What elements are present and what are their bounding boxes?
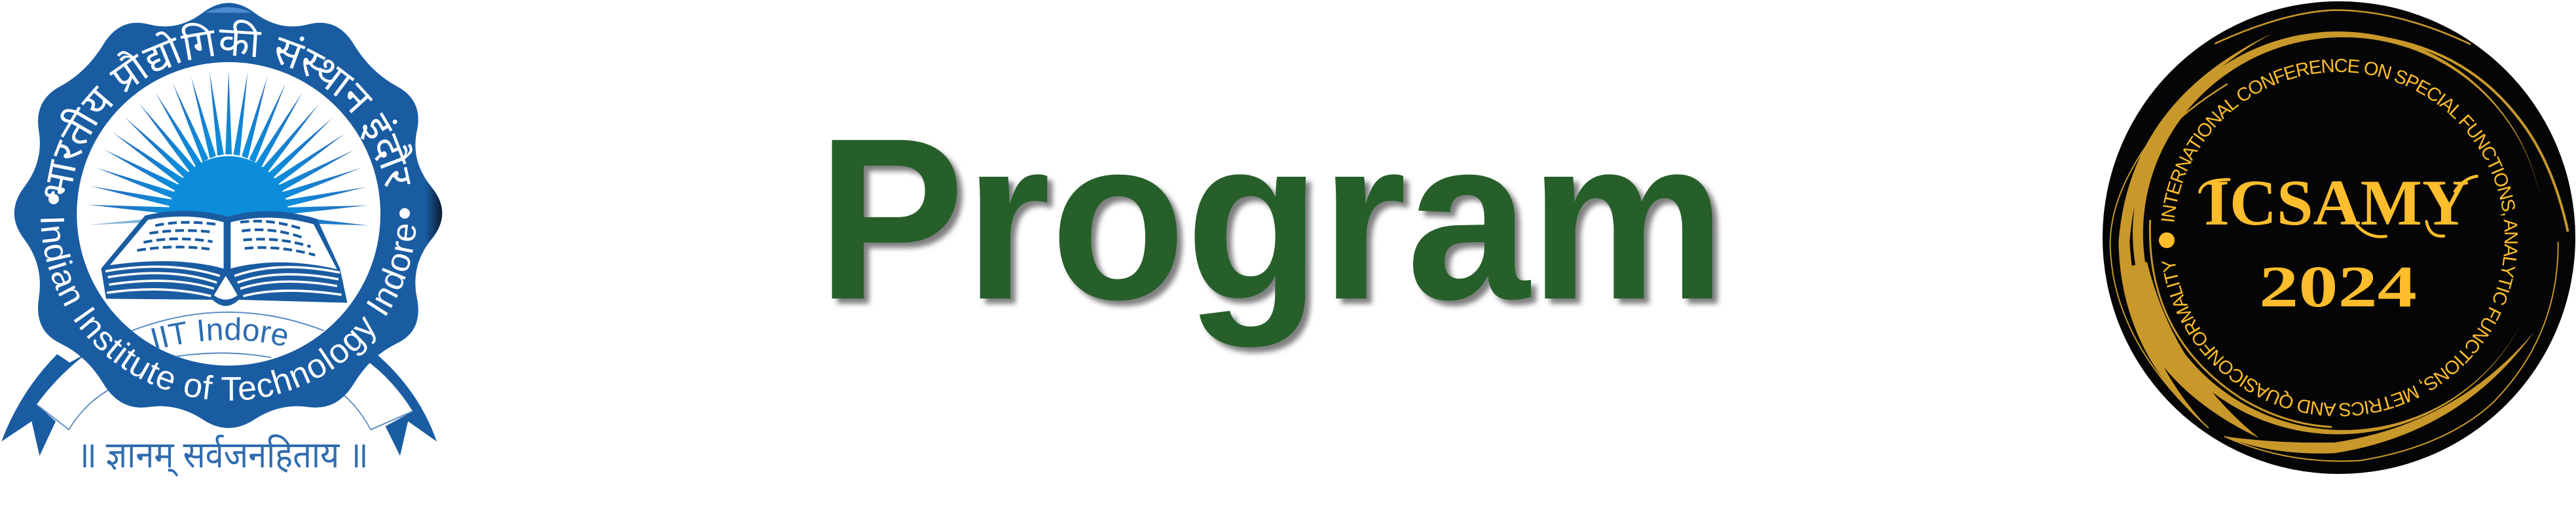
black disc xyxy=(2103,1,2575,474)
badge year: 2024 xyxy=(2259,255,2417,319)
left ribbon xyxy=(1,352,111,456)
white inner disc xyxy=(77,62,380,365)
seal badge and ribbons xyxy=(1,3,442,456)
badge name swashes xyxy=(2199,176,2477,237)
seal text: Hindi name: भारतीय प्रौद्योगिकी संस्थान इंदौर xyxy=(45,20,413,197)
top highlight xyxy=(205,7,252,12)
ring text: INTERNATIONAL CONFERENCE ON SPECIAL FUNCTIONS, ANALYTIC FUNCTIONS, METRICS AND QUASICONFORMALITY xyxy=(2161,59,2518,416)
logo: ICSAMY 2024 xyxy=(2103,1,2575,474)
title: Program xyxy=(817,90,1726,349)
sun rays xyxy=(88,71,369,229)
arcs around IIT Indore label xyxy=(132,312,324,357)
scalloped seal xyxy=(14,3,442,428)
rising sun xyxy=(168,156,289,218)
gold brush rings xyxy=(2110,10,2568,461)
seal text: English name: Indian Institute of Technology Indore xyxy=(41,219,416,401)
motto: ॥ ज्ञानम् सर्वजनहिताय ॥ xyxy=(77,434,368,477)
logo: IIT Indore xyxy=(1,3,443,477)
seal separator dots xyxy=(48,194,410,219)
label: IIT Indore: IIT Indore xyxy=(151,317,287,350)
badge name: ICSAMY xyxy=(2204,166,2469,239)
open book xyxy=(101,211,347,306)
right ribbon xyxy=(343,354,437,456)
ring dot xyxy=(2159,232,2175,248)
